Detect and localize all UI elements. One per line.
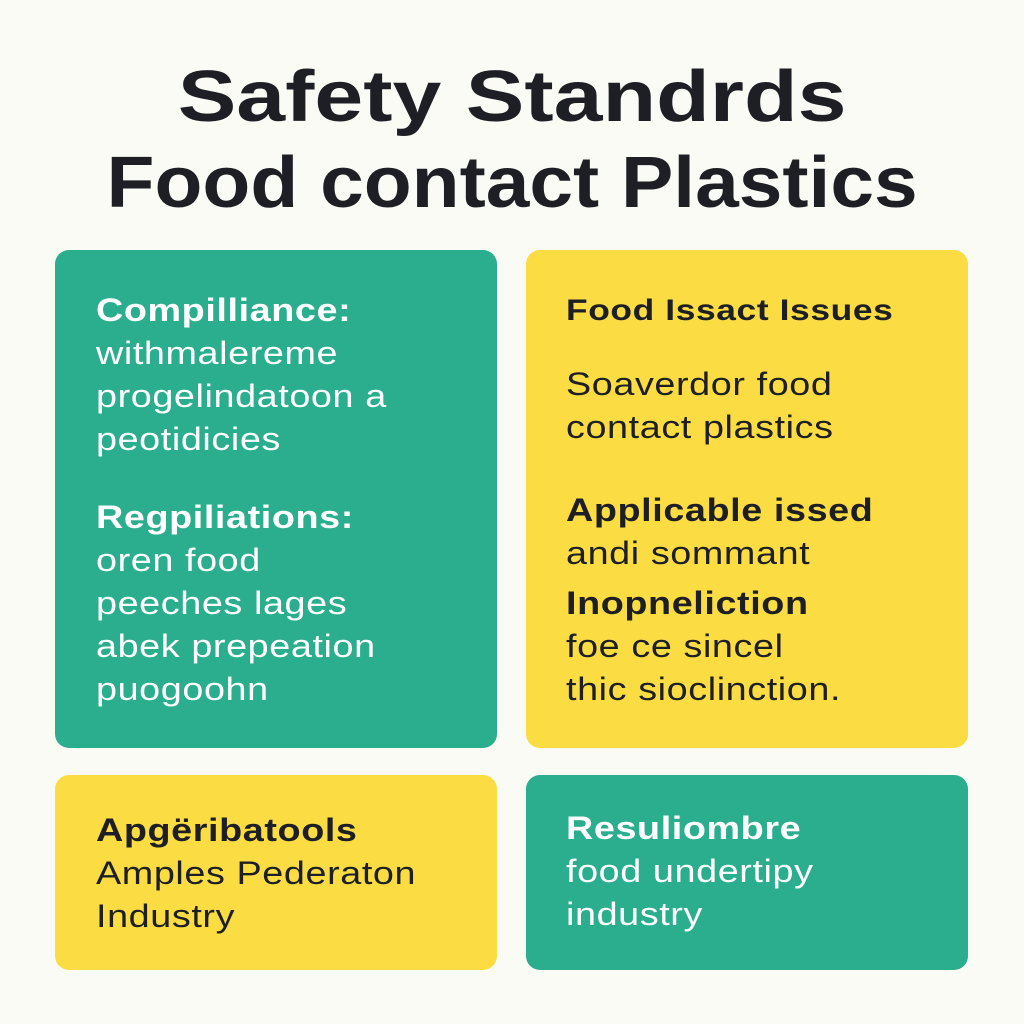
text: resuliombre: industry: [566, 896, 703, 932]
text: inopneliction: foe ce sincel: [566, 628, 784, 664]
panel: compliance: [55, 250, 497, 748]
title: Safety Standrds: [178, 57, 846, 137]
panel: apgeribatools: [55, 775, 497, 970]
text: compliance: peotidicies: [96, 421, 281, 457]
title: Food contact Plastics: [106, 143, 918, 223]
text: regulations: abek prepeation: [96, 628, 376, 664]
text: regulations: puogoohn: [96, 671, 269, 707]
text: regulations: Regpiliations:: [96, 499, 354, 535]
text: regulations: oren food: [96, 542, 261, 578]
text: apgeribatools: Industry: [96, 898, 235, 934]
text: inopneliction: [566, 585, 841, 707]
text: applicable: [566, 492, 873, 571]
text: resuliombre: food undertipy: [566, 853, 814, 889]
text: applicable: Applicable issed: [566, 492, 873, 528]
text: compliance: Compilliance:: [96, 292, 351, 328]
panel: resuliombre: [526, 775, 968, 970]
text: regulations: peeches lages: [96, 585, 347, 621]
text: resuliombre: Resuliombre: [566, 810, 801, 846]
text: resuliombre: [566, 810, 814, 932]
text: inopneliction: Inopneliction: [566, 585, 809, 621]
text: compliance: [96, 292, 387, 457]
panel: food issues: [526, 250, 968, 748]
text: inopneliction: thic sioclinction.: [566, 671, 841, 707]
text: apgeribatools: Amples Pederaton: [96, 855, 416, 891]
text: regulations: [96, 499, 376, 707]
text: apgeribatools: [96, 812, 416, 934]
text: apgeribatools: Apgëribatools: [96, 812, 358, 848]
text: compliance: progelindatoon a: [96, 378, 387, 414]
text: soaverdor: [566, 366, 834, 445]
heading: food issues: Food Issact Issues: [566, 294, 893, 327]
text: soaverdor: Soaverdor food: [566, 366, 832, 402]
title: [106, 57, 918, 223]
text: compliance: withmalereme: [96, 335, 338, 371]
text: soaverdor: contact plastics: [566, 409, 834, 445]
text: applicable: andi sommant: [566, 535, 810, 571]
